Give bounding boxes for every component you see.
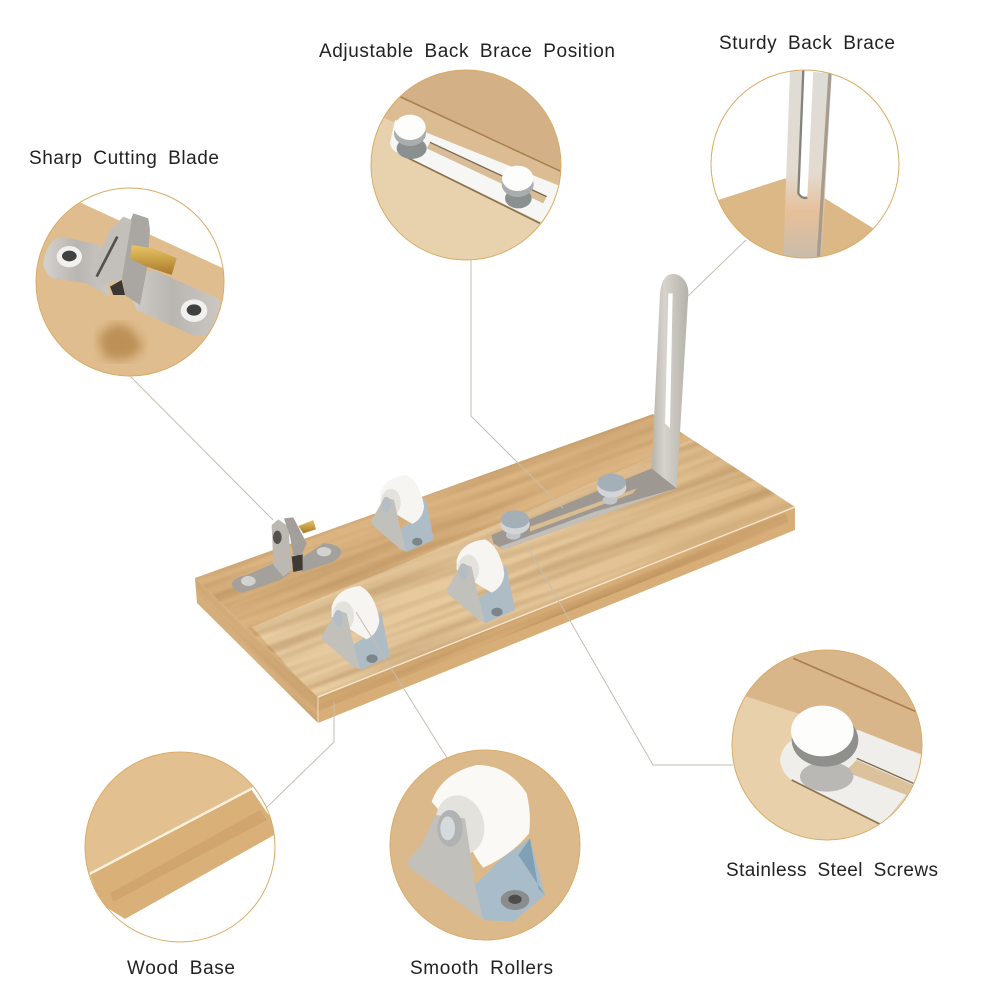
detail photo [390,750,580,940]
heading: Sturdy Back Brace [719,33,895,54]
panel: sharp cutting blade [29,148,230,380]
heading: Stainless Steel Screws [726,860,938,881]
roller back [371,475,434,552]
wood board [195,414,796,723]
connector lines [130,240,746,808]
thumb screw front [500,510,530,540]
product: wood base with fittings [195,274,796,723]
heading: Sharp Cutting Blade [29,148,219,169]
thumb screw rear [597,474,626,505]
roller front [322,586,390,670]
back brace [492,274,688,549]
heading: Adjustable Back Brace Position [319,41,615,62]
detail photo [732,650,922,840]
detail photo [718,70,873,258]
panel: wood base [80,745,280,979]
heading: Smooth Rollers [410,958,553,979]
panel: stainless steel screws [725,645,938,881]
detail photo [372,70,560,260]
cutting blade holder [232,517,342,593]
panel: sturdy back brace [710,35,900,258]
detail photo [36,202,224,376]
panel: smooth rollers [385,745,585,979]
panel: adjustable back brace position [319,41,615,265]
detail photo [86,752,274,919]
roller mid [447,539,515,623]
heading: Wood Base [127,958,235,979]
